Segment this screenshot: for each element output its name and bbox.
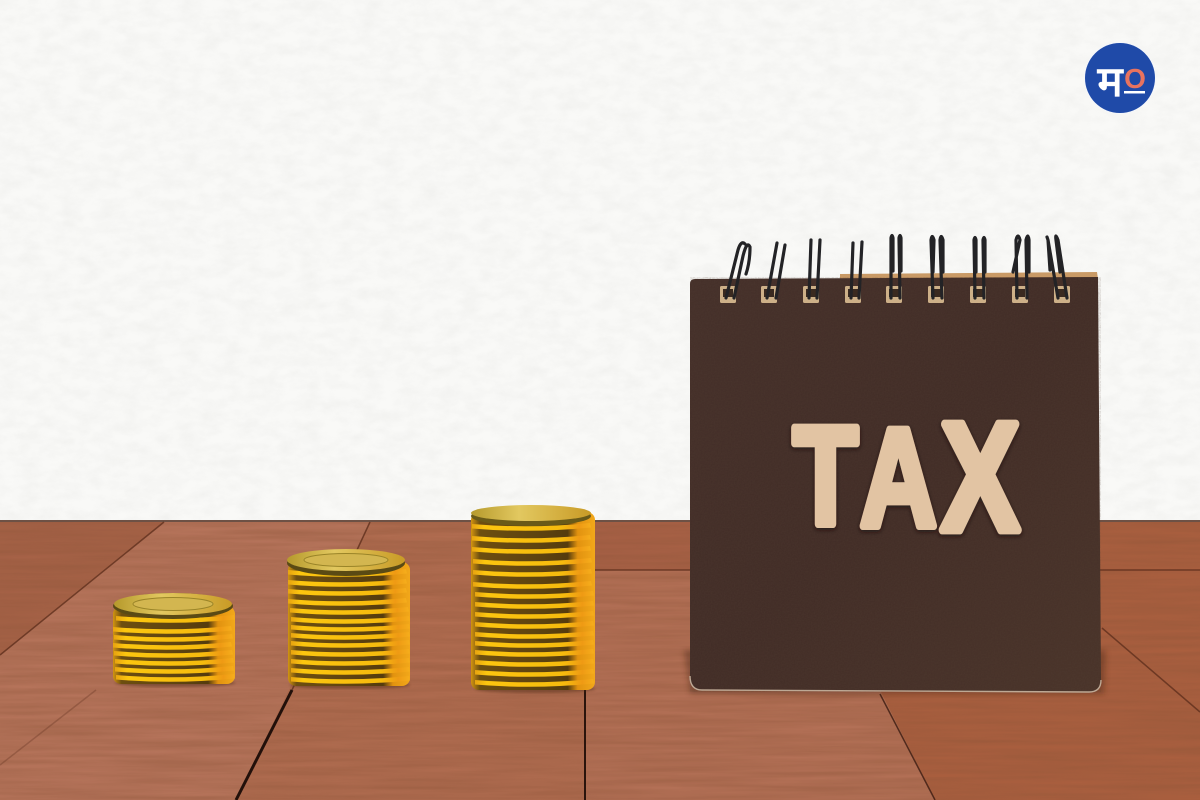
TAX wooden letters [793,392,1019,564]
notebook holes [720,286,1070,303]
logo badge [1084,42,1156,114]
wall: textured white paper [0,0,1200,522]
coin stack: small [113,593,235,687]
logo badge: O [1124,63,1146,94]
TAX wooden letters: A [860,400,937,556]
TAX wooden letters: T [793,398,858,554]
coin stack: medium [287,549,410,689]
wooden table top [0,520,1200,800]
coin stack: tall [471,505,595,693]
logo badge: म [1096,58,1124,105]
spiral binding wires [726,236,1067,298]
notebook: brown cover [690,272,1101,692]
notebook shadow [684,650,1106,694]
TAX wooden letters: X [941,392,1019,564]
